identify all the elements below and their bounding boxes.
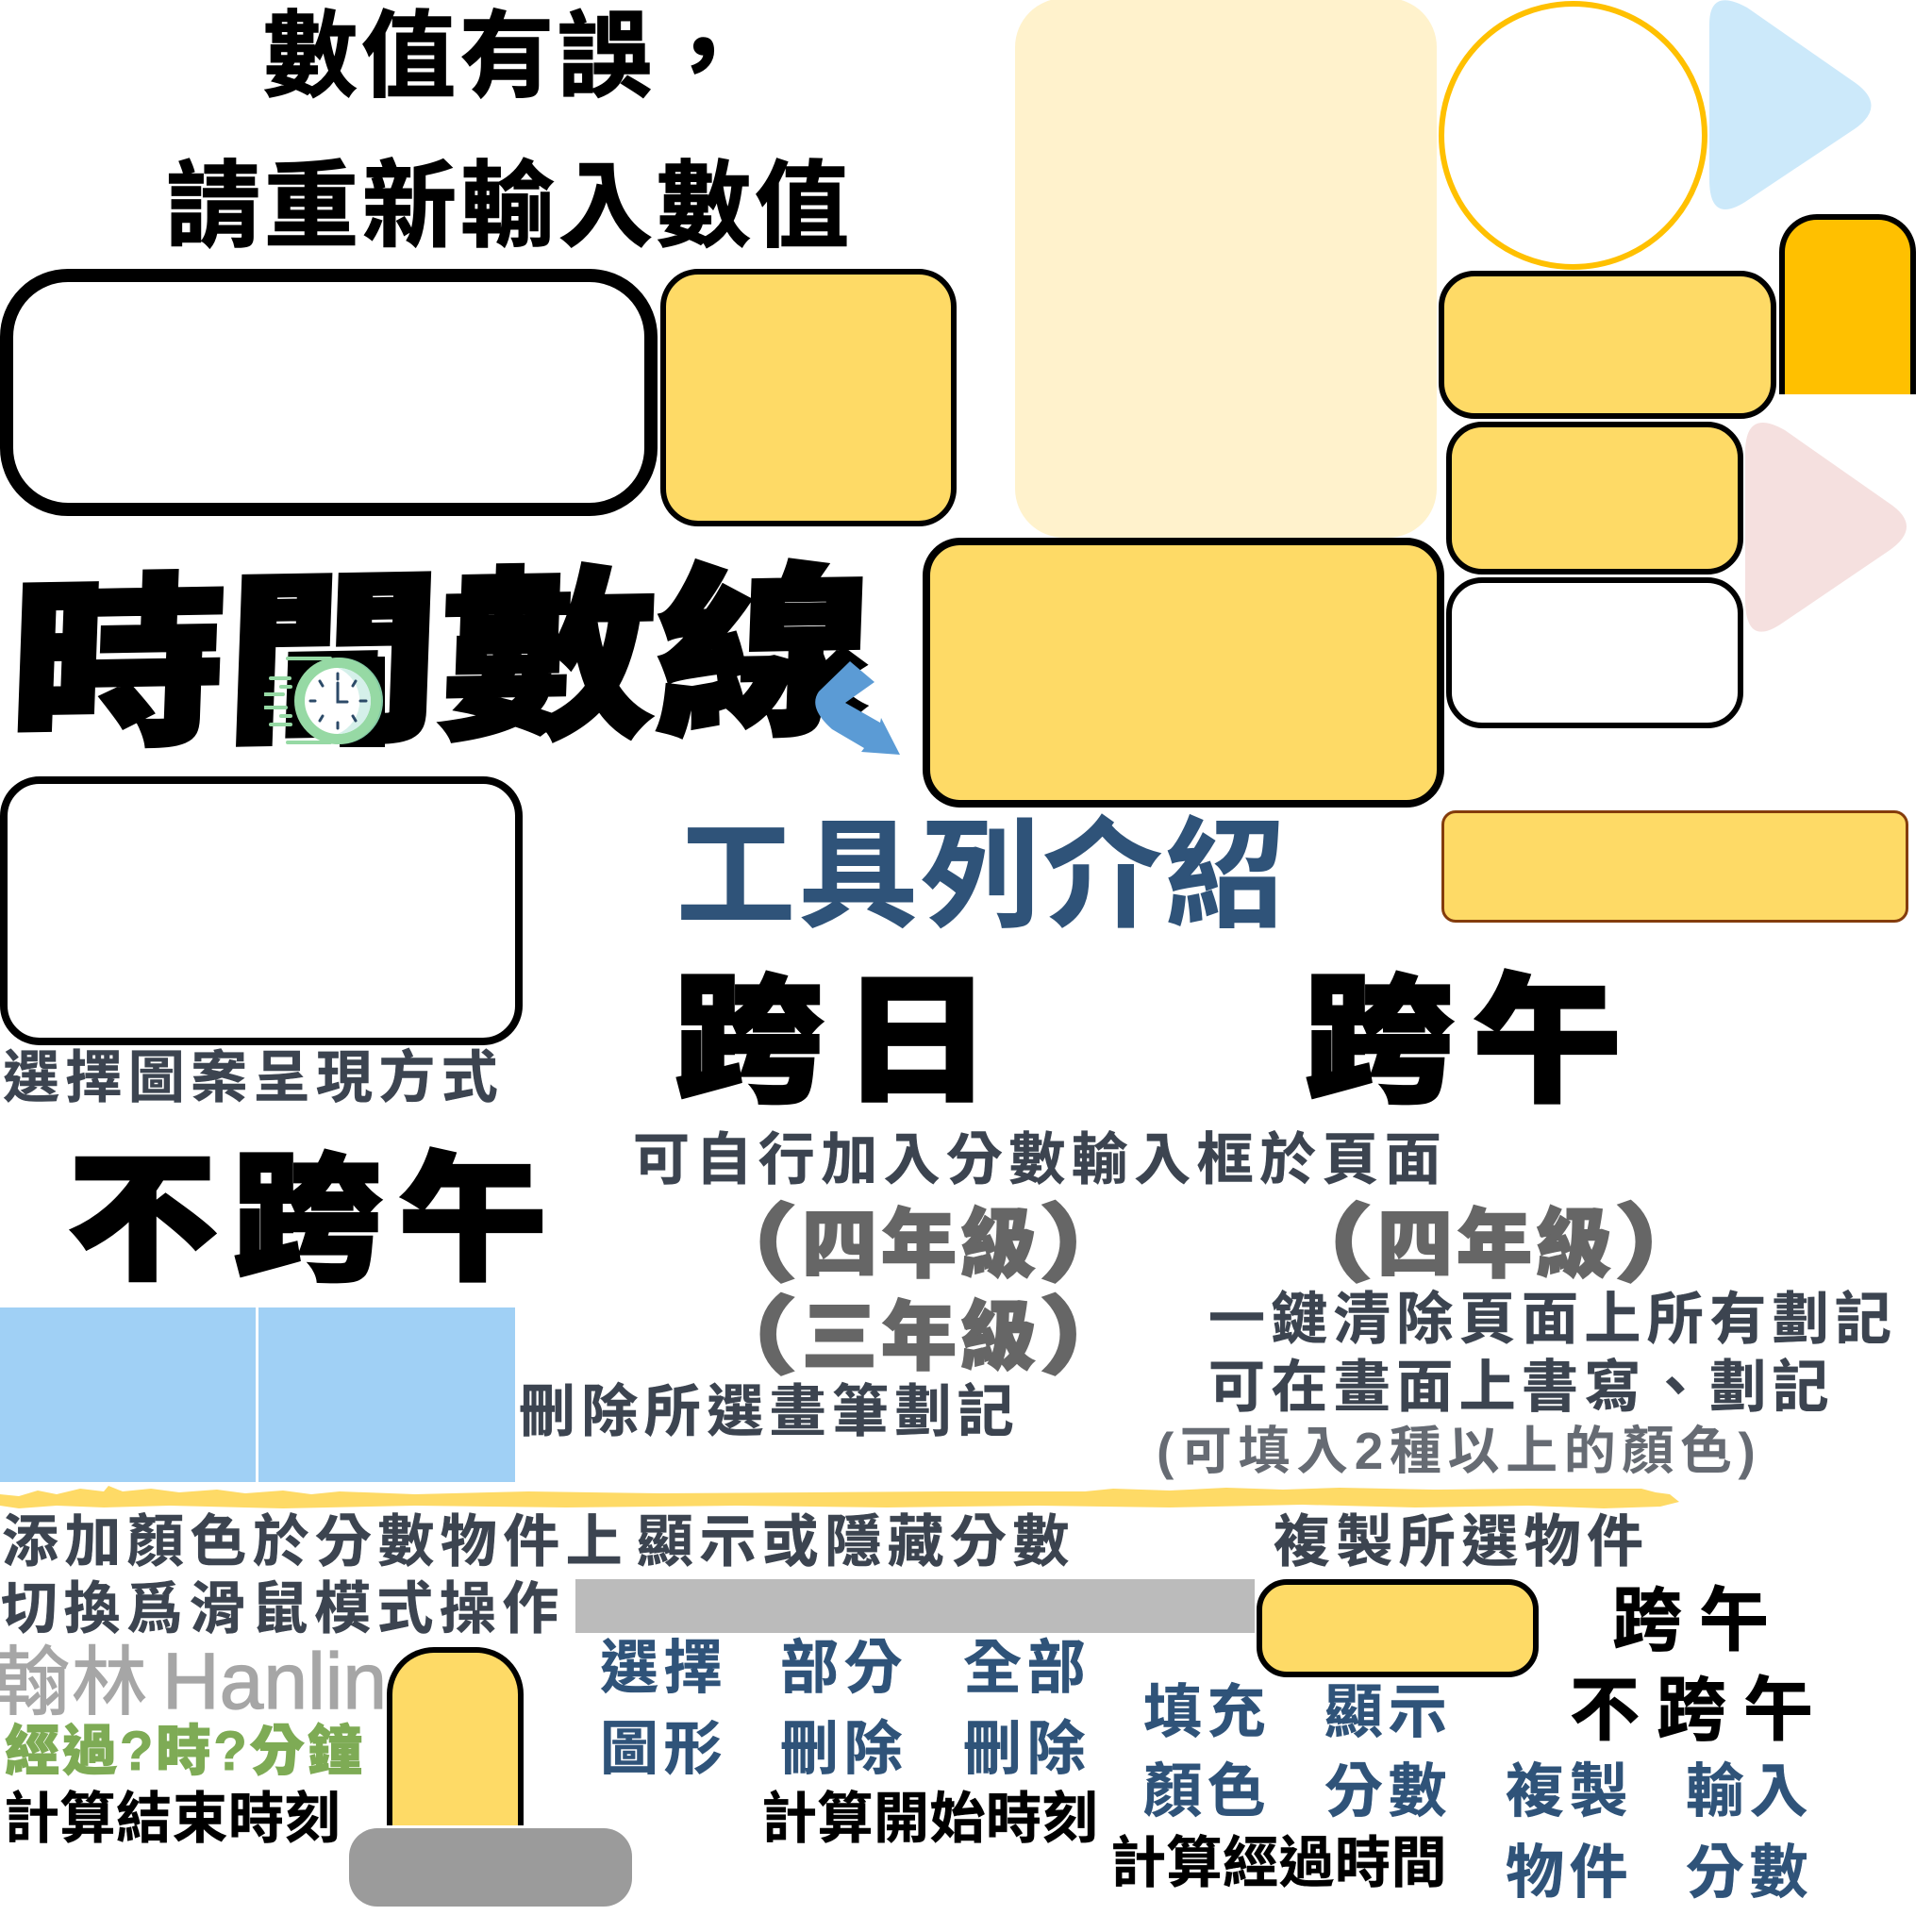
label: cross noon small: 跨午 bbox=[1612, 1581, 1786, 1659]
panel: white box medium bbox=[0, 776, 523, 1045]
label: switch to mouse mode: 切換爲滑鼠模式操作 bbox=[1, 1577, 565, 1641]
clock backing patch bbox=[340, 657, 385, 747]
label: fourth grade left bbox=[695, 1198, 1146, 1291]
icon: clock bbox=[264, 657, 383, 744]
label: copy selected object: 複製所選物件 bbox=[1274, 1510, 1649, 1574]
label: third grade: （ bbox=[695, 1291, 803, 1384]
label: third grade bbox=[695, 1291, 1146, 1384]
panel: small yellow box bbox=[1257, 1579, 1539, 1677]
panel: yellow button large bbox=[660, 269, 957, 526]
icon: pink triangle bbox=[1745, 423, 1907, 632]
label: partial delete: 刪除 bbox=[780, 1717, 908, 1782]
label: fourth grade right: ） bbox=[1614, 1198, 1722, 1291]
panel: white box C bbox=[1446, 577, 1743, 728]
panel: white input box large bbox=[0, 269, 658, 516]
label: fourth grade left: （ bbox=[695, 1198, 803, 1291]
label: delete all: 刪除 bbox=[963, 1717, 1091, 1782]
label: select shape: 圖形 bbox=[600, 1717, 727, 1782]
heading: toolbar introduction: 工具列介紹 bbox=[676, 809, 1288, 942]
label: fill colour: 填充 bbox=[1143, 1680, 1271, 1745]
icon: blue arrow bbox=[815, 661, 900, 755]
label: partial delete bbox=[780, 1636, 908, 1782]
label: partial delete: 部分 bbox=[780, 1636, 908, 1701]
label: no cross noon small: 不跨午 bbox=[1570, 1671, 1830, 1749]
heading: time number line: 時間數線 bbox=[8, 550, 875, 770]
label: fourth grade left: ） bbox=[1039, 1198, 1146, 1291]
panel: yellow box wide bbox=[923, 538, 1444, 808]
label: copy object: 物件 bbox=[1506, 1840, 1633, 1906]
label: third grade: 三年級 bbox=[802, 1295, 1040, 1379]
label: select shape: 選擇 bbox=[600, 1636, 727, 1701]
title line 1: 數值有誤， bbox=[263, 4, 754, 109]
panel: yellow box B bbox=[1446, 422, 1743, 575]
label: input score: 輸入 bbox=[1686, 1759, 1813, 1824]
panel: yellow tab bbox=[387, 1647, 524, 1825]
label: show score: 顯示 bbox=[1324, 1680, 1452, 1745]
label: elapsed hours and minutes: 經過?時?分鐘 bbox=[5, 1721, 365, 1782]
panel: gray bar bbox=[575, 1579, 1255, 1633]
label: delete selected marks: 刪除所選畫筆劃記 bbox=[519, 1380, 1020, 1443]
panel: pale yellow background bbox=[1015, 0, 1437, 538]
label: copy object: 複製 bbox=[1506, 1759, 1633, 1824]
label: calculate start time: 計算開始時刻 bbox=[761, 1788, 1098, 1850]
label: third grade: ） bbox=[1039, 1291, 1146, 1384]
label: calculate end time: 計算結束時刻 bbox=[4, 1788, 341, 1850]
label: fill colour bbox=[1143, 1680, 1271, 1824]
label: copy object bbox=[1506, 1759, 1633, 1906]
label: fourth grade right bbox=[1271, 1198, 1722, 1291]
heading: no cross noon: 不跨午 bbox=[68, 1143, 563, 1297]
heading: cross noon: 跨午 bbox=[1305, 965, 1641, 1119]
label: write on screen: 可在畫面上書寫、劃記 bbox=[1208, 1356, 1835, 1419]
label: fourth grade left: 四年級 bbox=[802, 1203, 1040, 1287]
label: clear all marks: 一鍵清除頁面上所有劃記 bbox=[1208, 1288, 1897, 1351]
label: input score: 分數 bbox=[1686, 1840, 1813, 1906]
label: input score bbox=[1686, 1759, 1813, 1906]
panel: orange tab bbox=[1779, 214, 1916, 394]
label: calculate elapsed time: 計算經過時間 bbox=[1110, 1832, 1447, 1894]
icon: blue triangle bbox=[1709, 0, 1872, 209]
brush stroke divider bbox=[0, 1486, 1679, 1508]
panel: blue block left bbox=[0, 1307, 256, 1482]
label: show score: 分數 bbox=[1324, 1759, 1452, 1824]
label: add score input: 可自行加入分數輸入框於頁面 bbox=[633, 1128, 1447, 1191]
label: fourth grade right: 四年級 bbox=[1377, 1203, 1615, 1287]
label: select shape bbox=[600, 1636, 727, 1782]
panel: yellow box A bbox=[1439, 271, 1776, 419]
label: delete all: 全部 bbox=[963, 1636, 1091, 1701]
heading: cross day: 跨日 bbox=[675, 965, 1010, 1119]
label: fill two colours: (可填入2種以上的顏色) bbox=[1157, 1422, 1761, 1480]
label: choose pattern display: 選擇圖案呈現方式 bbox=[3, 1046, 504, 1109]
title line 2: 請重新輸入數值 bbox=[166, 154, 853, 259]
label: add colour, show or hide score: 添加顏色於分數物件上顯示或隱藏分數 bbox=[2, 1510, 1075, 1574]
label: fourth grade right: （ bbox=[1271, 1198, 1378, 1291]
panel: blue block right bbox=[258, 1307, 515, 1482]
panel: gray pill bbox=[349, 1828, 632, 1907]
circle outline bbox=[1439, 1, 1707, 270]
label: show score bbox=[1324, 1680, 1452, 1824]
panel: brown outlined yellow bar bbox=[1441, 810, 1908, 923]
label: fill colour: 顏色 bbox=[1143, 1759, 1271, 1824]
label: delete all bbox=[963, 1636, 1091, 1782]
